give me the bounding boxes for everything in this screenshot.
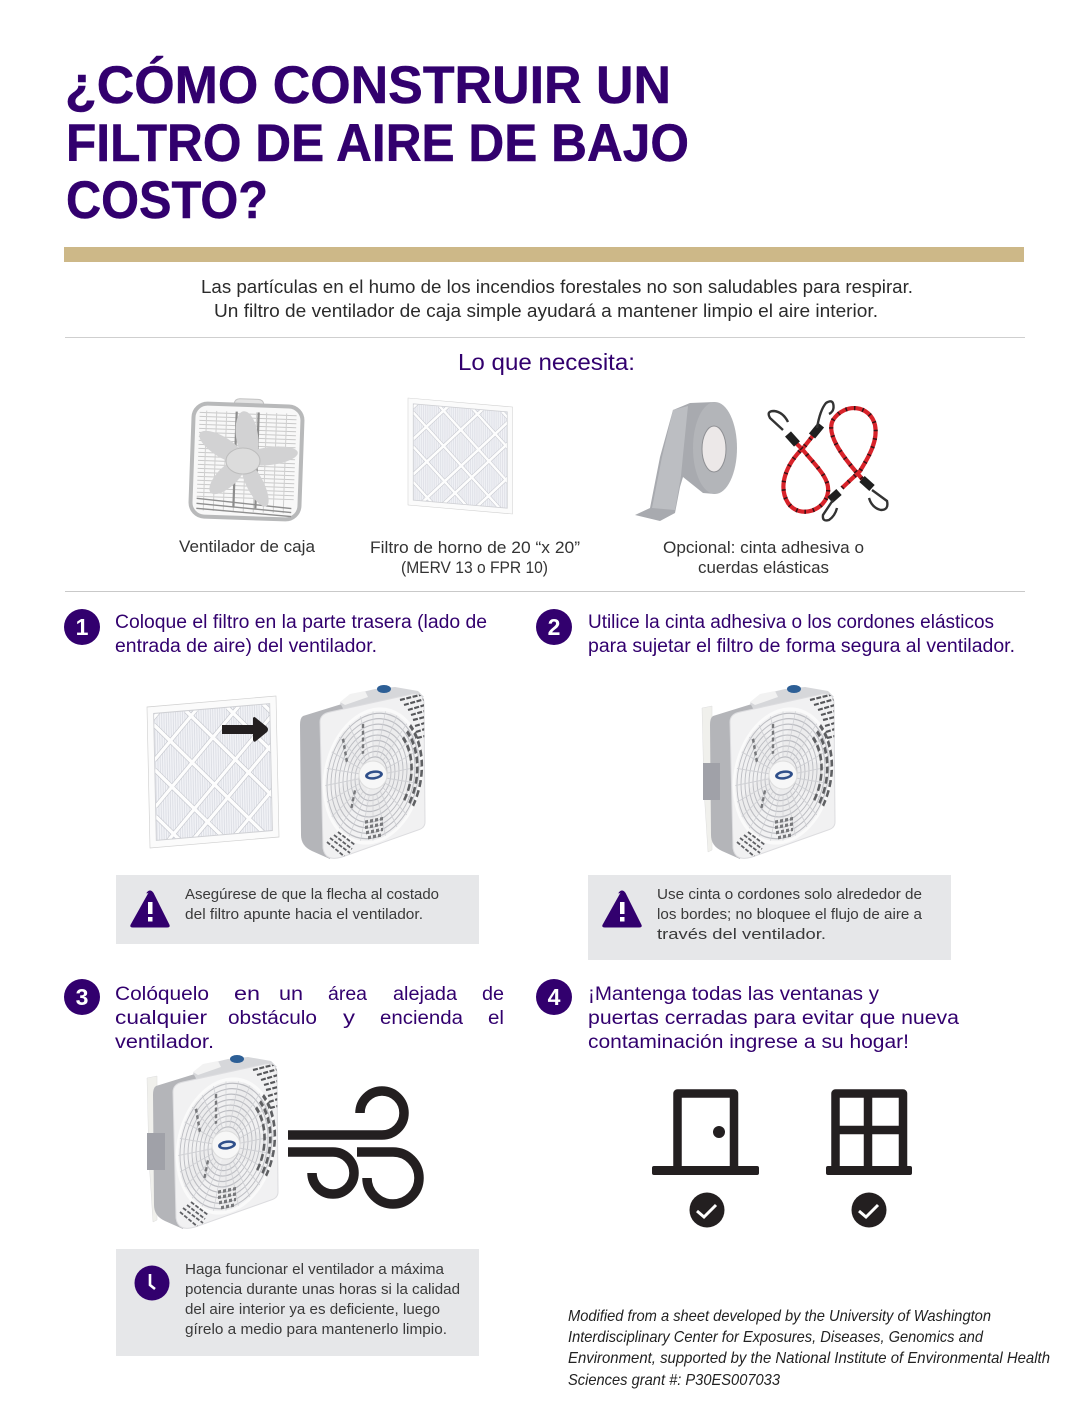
step 3 callout: gírelo a medio para mantenerlo limpio.: [185, 1322, 447, 1338]
step 1 image: fan: [300, 685, 425, 859]
title: FILTRO DE AIRE DE BAJO: [66, 114, 689, 173]
step 3 callout: del aire interior ya es deficiente, luego: [185, 1302, 440, 1318]
step 3 number badge: 3: [76, 984, 88, 1010]
label: furnace filter: Filtro de horno de 20 “x 20”: [370, 539, 580, 557]
step 2 heading: Utilice la cinta adhesiva o los cordones elásticos: [588, 612, 994, 633]
step 3 heading: cualquier: [115, 1008, 208, 1029]
gold title bar: [64, 247, 1024, 262]
step 2 callout: Use cinta o cordones solo alrededor de: [657, 887, 922, 903]
intro text: Un filtro de ventilador de caja simple ayudará a mantener limpio el aire interior.: [214, 300, 878, 321]
step 3 callout: [116, 1249, 479, 1356]
step 4 number badge: [536, 979, 572, 1015]
step 2 heading: para sujetar el filtro de forma segura al ventilador.: [588, 636, 1015, 657]
step 3 heading: en: [234, 984, 260, 1005]
label: box fan: Ventilador de caja: [179, 538, 316, 556]
step 1 number badge: 1: [76, 614, 89, 640]
step 3 callout: potencia durante unas horas si la calidad: [185, 1282, 460, 1298]
step 2 callout: través del ventilador.: [657, 927, 826, 943]
step 2 number badge: 2: [548, 614, 560, 640]
intro text: [201, 276, 913, 321]
heading: what you need: Lo que necesita:: [458, 349, 635, 375]
step 1 heading: entrada de aire) del ventilador.: [115, 636, 377, 657]
icon: window check mark: [852, 1192, 886, 1228]
footer credit: Sciences grant #: P30ES007033: [568, 1372, 780, 1389]
step 3 heading: área: [328, 984, 367, 1005]
step 3 heading: el: [488, 1008, 504, 1029]
step 3 heading: [115, 984, 504, 1053]
icon: warning: [131, 891, 169, 927]
step 1 callout: [116, 875, 479, 944]
step 1 number badge: [64, 609, 100, 645]
step 4 heading: puertas cerradas para evitar que nueva: [588, 1008, 959, 1029]
icon: clock: [134, 1266, 170, 1300]
title: COSTO?: [66, 171, 268, 230]
step 1 callout: Asegúrese de que la flecha al costado: [185, 887, 439, 903]
label: optional tape or bungee cords: [663, 539, 864, 577]
step 2 number badge: [536, 609, 572, 645]
label: optional tape or bungee cords: Opcional: cinta adhesiva o: [663, 539, 864, 557]
icon: bungee cords: [769, 401, 887, 520]
step 3 image: wind icon: [288, 1091, 419, 1204]
icon: furnace filter: [403, 392, 518, 520]
step 2 image: fan with filter taped: [702, 685, 835, 859]
step 1 image: filter: [140, 688, 286, 856]
step 1 heading: [115, 612, 487, 657]
icon: box fan: [190, 397, 303, 520]
footer credit: Interdisciplinary Center for Exposures, Diseases, Genomics and: [568, 1329, 984, 1346]
step 3 heading: alejada: [393, 984, 457, 1005]
step 1 heading: Coloque el filtro en la parte trasera (lado de: [115, 612, 487, 633]
title: ¿CÓMO CONSTRUIR UN: [65, 55, 671, 115]
step 4 heading: contaminación ingrese a su hogar!: [588, 1032, 909, 1053]
step 2 callout: los bordes; no bloquee el flujo de aire a: [657, 907, 923, 923]
step 3 callout: Haga funcionar el ventilador a máxima: [185, 1262, 445, 1278]
step 1 image: arrow: [222, 717, 268, 742]
step 2 callout: [588, 875, 951, 960]
title: [65, 55, 689, 230]
footer credit: [568, 1308, 1050, 1389]
step 1 callout: del filtro apunte hacia el ventilador.: [185, 907, 423, 923]
step 3 heading: ventilador.: [115, 1032, 214, 1053]
step 3 heading: Colóquelo: [115, 984, 209, 1005]
step 3 heading: un: [279, 984, 303, 1005]
step 3 heading: de: [482, 984, 504, 1005]
label: optional tape or bungee cords: cuerdas elásticas: [698, 559, 829, 577]
icon: door check mark: [690, 1192, 724, 1228]
icon: door: [652, 1094, 759, 1175]
step 4 number badge: 4: [548, 984, 561, 1010]
step 3 number badge: [64, 979, 100, 1015]
label: furnace filter: (MERV 13 o FPR 10): [401, 559, 548, 577]
step 4 heading: [588, 984, 959, 1053]
step 3 heading: encienda: [380, 1008, 463, 1029]
footer credit: Modified from a sheet developed by the University of Washington: [568, 1308, 991, 1325]
step 3 heading: obstáculo: [228, 1008, 317, 1029]
icon: window: [826, 1094, 912, 1175]
step 2 heading: [588, 612, 1015, 657]
step 3 image: fan: [147, 1055, 278, 1229]
icon: duct tape: [635, 402, 737, 521]
step 3 heading: y: [343, 1008, 356, 1029]
step 4 heading: ¡Mantenga todas las ventanas y: [588, 984, 880, 1005]
icon: warning: [603, 891, 641, 927]
footer credit: Environment, supported by the National Institute of Environmental Health: [568, 1350, 1050, 1367]
intro text: Las partículas en el humo de los incendios forestales no son saludables para respirar.: [201, 276, 913, 297]
label: furnace filter: [370, 539, 580, 577]
